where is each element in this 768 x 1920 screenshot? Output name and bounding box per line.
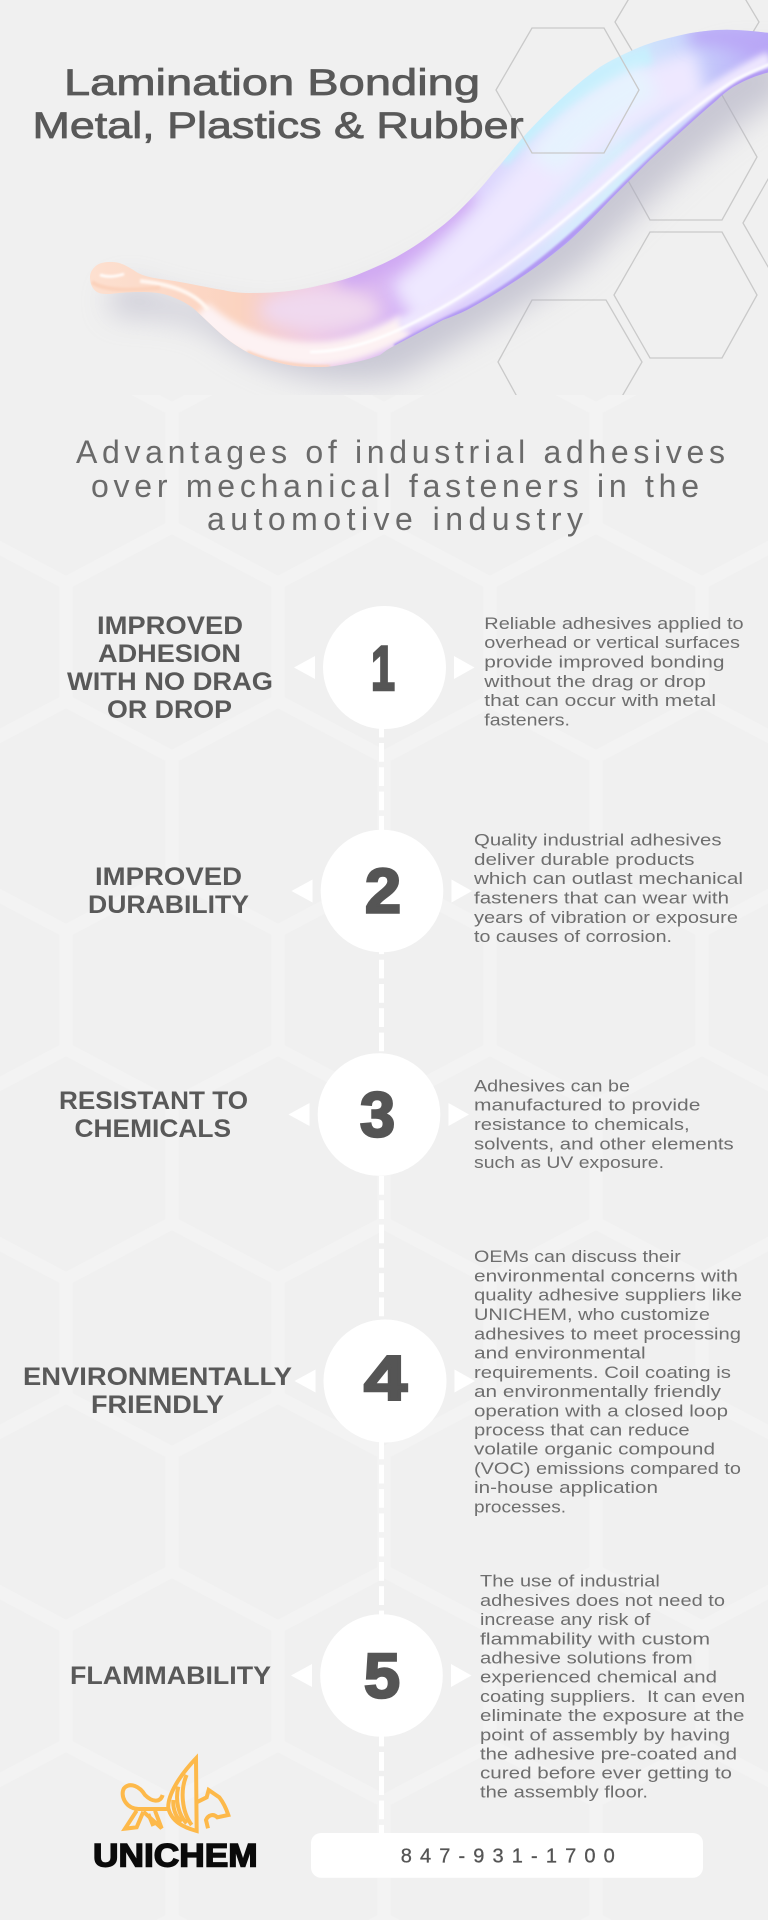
step 1 description	[483, 615, 744, 730]
step 4 description: operation with a closed loop	[474, 1402, 728, 1420]
step 4 description: requirements. Coil coating is	[474, 1364, 731, 1382]
step 5 description	[480, 1573, 745, 1802]
step 1 heading	[67, 612, 273, 724]
step 2 heading: DURABILITY	[88, 891, 249, 919]
step 1	[67, 606, 744, 730]
phone number box	[311, 1833, 703, 1878]
step 1 heading: IMPROVED	[97, 612, 243, 640]
step 3 number badge	[288, 1053, 469, 1176]
logo: griffin icon	[123, 1758, 228, 1831]
subtitle	[76, 434, 725, 537]
step 1 description: provide improved bonding	[484, 654, 724, 672]
step 3 description: such as UV exposure.	[474, 1154, 664, 1172]
step 4 description: UNICHEM, who customize	[474, 1306, 710, 1324]
step 5 description: increase any risk of	[480, 1611, 651, 1629]
step 4 description: process that can reduce	[474, 1422, 690, 1440]
title	[32, 61, 524, 146]
step 3 description: resistance to chemicals,	[474, 1116, 690, 1134]
step 3 description: solvents, and other elements	[474, 1135, 734, 1153]
step 2 heading: IMPROVED	[95, 863, 242, 891]
step 2 description: to causes of corrosion.	[474, 928, 672, 946]
step 5 description: The use of industrial	[480, 1573, 660, 1591]
step 3 description: manufactured to provide	[474, 1097, 700, 1115]
step 1 description: without the drag or drop	[483, 673, 706, 691]
step 5 description: the assembly floor.	[480, 1784, 648, 1802]
step 5 description: adhesive solutions from	[480, 1649, 693, 1667]
step 4	[23, 1248, 742, 1516]
step 4 description: (VOC) emissions compared to	[474, 1460, 741, 1478]
dashed timeline	[379, 719, 384, 1834]
step 4 description: in-house application	[474, 1479, 658, 1497]
step 1 description: that can occur with metal	[484, 692, 716, 710]
step 3 description: Adhesives can be	[474, 1077, 630, 1095]
background hexagon pattern	[0, 395, 768, 1920]
step 2 heading	[88, 863, 249, 919]
step 1 number badge	[294, 606, 474, 729]
phone number box: 847-931-1700	[401, 1845, 615, 1867]
step 4 description: environmental concerns with	[474, 1267, 738, 1285]
step 4 description: processes.	[474, 1498, 566, 1516]
step 5 number badge: 5	[364, 1642, 400, 1712]
step 1 heading: ADHESION	[98, 640, 241, 668]
subtitle: automotive industry	[207, 501, 583, 537]
step 2 number badge: 2	[365, 856, 401, 926]
step 3 number badge: 3	[360, 1080, 395, 1150]
step 4 description: adhesives to meet processing	[474, 1325, 741, 1343]
step 4 heading	[23, 1363, 292, 1419]
step 3	[59, 1053, 734, 1176]
step 5 number badge	[291, 1614, 472, 1737]
step 3 heading	[59, 1087, 248, 1143]
step 5 description: flammability with custom	[480, 1630, 710, 1648]
step 1 heading: OR DROP	[107, 696, 232, 724]
step 5 description: adhesives does not need to	[480, 1592, 725, 1610]
subtitle: over mechanical fasteners in the	[91, 468, 699, 504]
step 3 description	[474, 1077, 734, 1172]
subtitle: Advantages of industrial adhesives	[76, 434, 725, 470]
step 4 description: an environmentally friendly	[474, 1383, 722, 1401]
step 4 number badge	[294, 1320, 475, 1442]
step 4 description: OEMs can discuss their	[474, 1248, 681, 1266]
step 5 description: eliminate the exposure at the	[480, 1707, 744, 1725]
step 4 description: quality adhesive suppliers like	[474, 1287, 742, 1305]
step 4 description	[474, 1248, 742, 1516]
step 2 description: fasteners that can wear with	[474, 890, 729, 908]
hexagon outlines behind ribbon	[498, 0, 768, 424]
step 4 number badge: 4	[364, 1344, 407, 1414]
step 1 description: Reliable adhesives applied to	[484, 615, 744, 633]
step 4 heading: ENVIRONMENTALLY	[23, 1363, 292, 1391]
step 2	[88, 830, 743, 952]
title: Lamination Bonding	[64, 61, 480, 103]
step 2 number badge	[292, 830, 472, 952]
step 2 description: deliver durable products	[474, 851, 694, 869]
step 1 heading: WITH NO DRAG	[67, 668, 273, 696]
step 4 description: and environmental	[474, 1345, 646, 1363]
title: Metal, Plastics & Rubber	[32, 104, 524, 146]
hexagon outline over ribbon	[496, 28, 639, 153]
step 3 heading: CHEMICALS	[74, 1115, 231, 1143]
step 5	[70, 1573, 745, 1802]
step 1 description: fasteners.	[484, 712, 570, 730]
step 3 heading: RESISTANT TO	[59, 1087, 248, 1115]
step 5 description: cured before ever getting to	[480, 1765, 732, 1783]
step 5 heading: FLAMMABILITY	[70, 1662, 271, 1690]
ribbon illustration	[80, 20, 768, 381]
step 1 description: overhead or vertical surfaces	[484, 634, 740, 652]
step 5 description: experienced chemical and	[480, 1669, 717, 1687]
step 2 description: years of vibration or exposure	[474, 909, 738, 927]
step 5 description: the adhesive pre-coated and	[480, 1745, 737, 1763]
step 2 description: Quality industrial adhesives	[474, 832, 722, 850]
step 5 description: coating suppliers. It can even	[480, 1688, 745, 1706]
step 4 description: volatile organic compound	[474, 1441, 715, 1459]
step 5 description: point of assembly by having	[480, 1726, 730, 1744]
step 4 heading: FRIENDLY	[91, 1391, 224, 1419]
step 1 number badge: 1	[371, 634, 395, 704]
step 2 description	[473, 832, 743, 946]
step 2 description: which can outlast mechanical	[473, 870, 743, 888]
logo: UNICHEM wordmark: UNICHEM	[93, 1838, 258, 1874]
